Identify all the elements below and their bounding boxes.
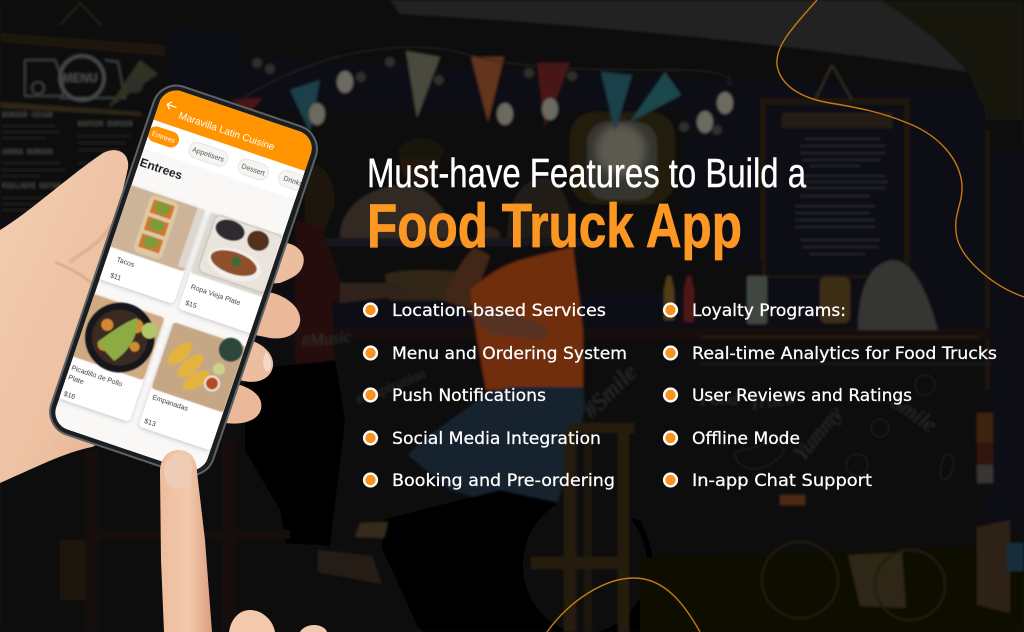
category chips: Entrees bbox=[151, 131, 176, 145]
finger one bbox=[255, 240, 304, 285]
back arrow bbox=[166, 101, 177, 110]
chalk lettering on truck side: Food bbox=[699, 389, 739, 409]
market table legs bbox=[85, 440, 290, 632]
chalk lettering on truck side: Yummy bbox=[788, 401, 847, 465]
phone bbox=[44, 79, 326, 482]
chalk lettering on truck side: Smile bbox=[887, 389, 942, 437]
woman's arm bbox=[443, 247, 490, 310]
card: ropa vieja: Ropa Vieja Plate bbox=[190, 284, 241, 307]
card: picadillo: $16 bbox=[63, 391, 76, 401]
hand holding phone bbox=[0, 150, 304, 483]
title line two: Food Truck App bbox=[367, 192, 742, 261]
card: tacos bbox=[98, 185, 205, 304]
card: tacos: $11 bbox=[109, 272, 122, 283]
finger three bbox=[225, 338, 273, 382]
fingernail on index finger bbox=[164, 454, 192, 489]
right side panel bbox=[988, 150, 1024, 530]
item: booking: Booking and Pre-ordering bbox=[392, 471, 615, 490]
background: dark food truck photo: BURGER CESAR bbox=[2, 112, 53, 120]
ground bbox=[0, 525, 320, 632]
title bbox=[367, 150, 806, 261]
truck wheel bbox=[382, 490, 655, 632]
wooden stool bbox=[531, 423, 634, 632]
second fingertip bbox=[229, 610, 275, 632]
man's arm on counter bbox=[340, 283, 412, 303]
chalk lettering on truck side: Truck bbox=[748, 387, 797, 415]
phone body bbox=[44, 79, 323, 482]
chalk lettering on truck side: #Inspiration bbox=[354, 366, 428, 409]
item: push notifications: Push Notifications bbox=[392, 386, 546, 405]
woman's forearm bbox=[467, 306, 548, 340]
card: tacos: Tacos bbox=[115, 257, 135, 269]
plaid shirt bbox=[295, 220, 355, 375]
serving window bbox=[235, 110, 685, 245]
card: empanadas: $13 bbox=[143, 418, 157, 428]
truck logo bbox=[25, 56, 125, 100]
bicycle bbox=[762, 542, 945, 620]
item: reviews: User Reviews and Ratings bbox=[692, 386, 912, 405]
palm crease bbox=[55, 262, 110, 300]
rear light bbox=[977, 413, 993, 483]
card: picadillo: Plate bbox=[67, 374, 85, 386]
decorative curve: bottom arc bbox=[547, 578, 700, 632]
background: dark food truck photo: RAMION BURGER bbox=[78, 121, 133, 129]
card: ropa vieja bbox=[178, 212, 289, 335]
phone screen bbox=[49, 85, 324, 478]
decorative curve: top right bbox=[777, 0, 1024, 297]
card: picadillo: Picadillo de Pollo bbox=[70, 365, 123, 389]
string lights bbox=[127, 47, 733, 135]
card: empanadas bbox=[138, 318, 247, 451]
sunlit ground patches bbox=[318, 550, 382, 584]
item: offline: Offline Mode bbox=[692, 429, 800, 448]
plate light bbox=[780, 495, 805, 505]
counter bbox=[320, 238, 600, 246]
category chips: Drinks bbox=[282, 175, 304, 188]
woman jeans bbox=[408, 387, 584, 607]
section heading: Entrees bbox=[138, 155, 185, 183]
man's trousers bbox=[245, 360, 345, 612]
item: menu and ordering: Menu and Ordering System bbox=[392, 344, 627, 363]
thumb shadow bbox=[70, 225, 112, 262]
item: social media: Social Media Integration bbox=[392, 429, 601, 448]
woman's shoe bbox=[432, 608, 508, 632]
item: chat: In-app Chat Support bbox=[692, 471, 873, 490]
third fingertip bbox=[300, 625, 327, 632]
lantern bbox=[820, 277, 850, 323]
background: dark food truck photo: ARMOA BURGER bbox=[2, 149, 53, 157]
category chips bbox=[143, 119, 313, 202]
truck lower body bbox=[0, 340, 990, 555]
card: picadillo bbox=[57, 292, 165, 422]
chalk lettering on truck side: #Smile bbox=[578, 359, 643, 424]
fingernail bbox=[263, 352, 271, 372]
truck roof bbox=[390, 0, 968, 72]
card: ropa vieja: $15 bbox=[184, 300, 198, 310]
chalk lettering on truck side: #Music bbox=[300, 327, 353, 351]
tree foliage top right bbox=[870, 0, 1024, 120]
chalk food doodles bbox=[735, 375, 954, 480]
menu board text: MENU bbox=[62, 71, 98, 85]
man's shoe bbox=[296, 608, 345, 632]
background: dark food truck photo: MIELJEMI BATAR bbox=[2, 183, 62, 191]
bearded man bbox=[305, 164, 335, 235]
bunting flags bbox=[108, 51, 681, 132]
feature list: right column bbox=[663, 301, 997, 490]
app title: Maravilla Latin Cuisine bbox=[177, 110, 276, 153]
item: analytics: Real-time Analytics for Food Trucks bbox=[692, 344, 997, 363]
card: empanadas: Empanadas bbox=[151, 394, 189, 413]
chalk menu board right bbox=[760, 98, 910, 278]
finger two bbox=[240, 290, 300, 338]
person in window with cap bbox=[340, 138, 500, 245]
left menu board bbox=[0, 22, 170, 217]
item: location-based services: Location-based Services bbox=[392, 301, 606, 320]
category chips: Appetisers bbox=[191, 147, 225, 164]
truck upper body bbox=[0, 22, 990, 340]
app header bbox=[153, 86, 317, 171]
title line one: Must-have Features to Build a bbox=[367, 150, 806, 196]
category chips: Dessert bbox=[240, 163, 266, 178]
feature list: left column bbox=[363, 301, 627, 490]
index finger tapping screen bbox=[160, 450, 212, 632]
chalk lettering on truck side bbox=[300, 327, 942, 465]
backpack bbox=[858, 260, 938, 330]
item: loyalty: Loyalty Programs: bbox=[692, 301, 846, 320]
bottles and items on counter bbox=[664, 276, 674, 320]
woman orange shirt bbox=[470, 247, 583, 392]
woman's hair bbox=[508, 178, 573, 262]
finger four bbox=[225, 385, 261, 424]
palm and thumb bbox=[0, 150, 150, 483]
